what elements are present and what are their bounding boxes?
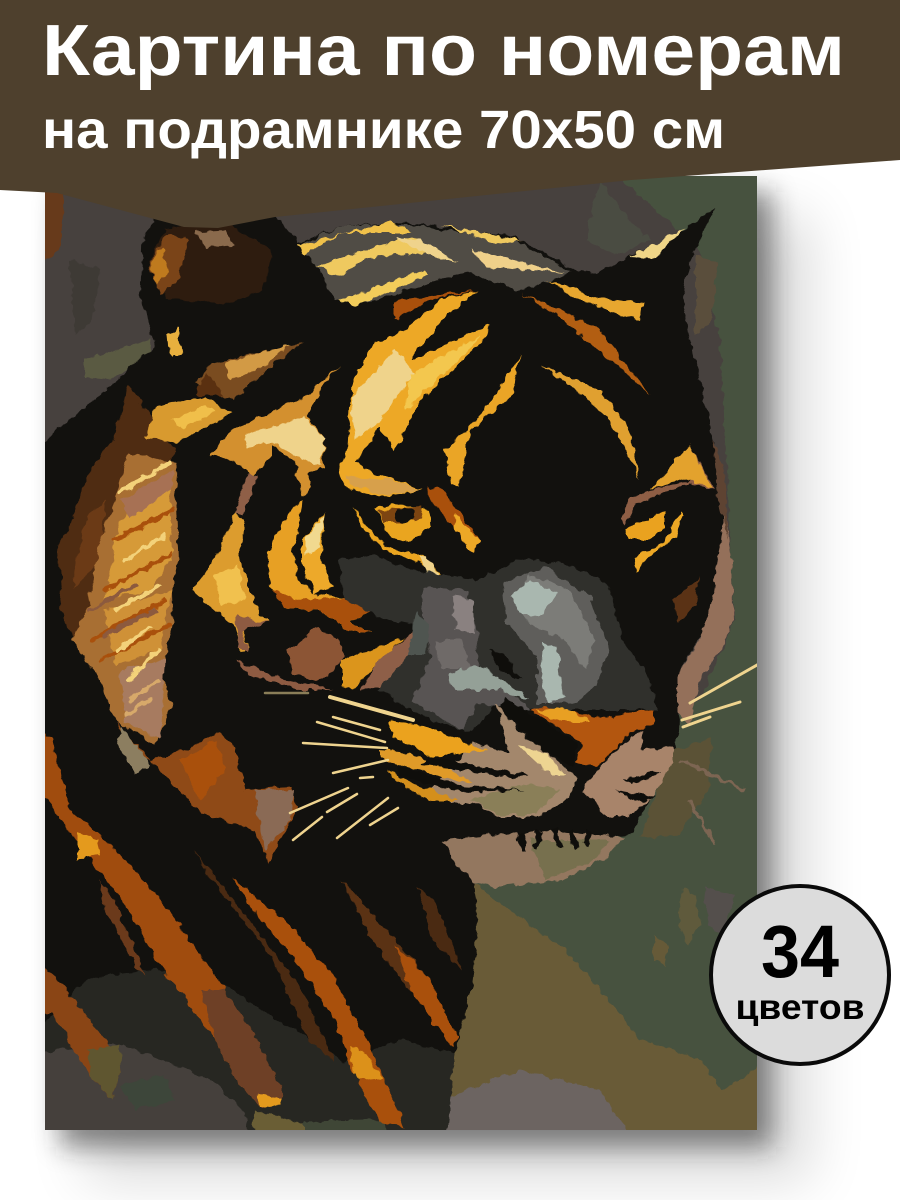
header banner	[0, 0, 900, 228]
mane brush strokes	[90, 462, 172, 715]
left cheek markings	[192, 365, 425, 690]
chest fur	[115, 720, 298, 863]
badge: 34 colours	[711, 886, 889, 1064]
body stripes	[30, 725, 462, 1127]
mane	[58, 343, 302, 745]
painted background	[30, 160, 770, 1150]
title: Картина по номерам	[42, 11, 845, 91]
right eye	[623, 510, 683, 573]
badge label: цветов	[736, 988, 864, 1027]
nose	[500, 697, 655, 767]
muzzle stripes and pads	[380, 703, 673, 817]
muzzle	[338, 555, 657, 733]
subtitle: на подрамнике 70х50 см	[42, 100, 725, 160]
badge number: 34	[761, 910, 839, 993]
whiskers	[265, 665, 757, 840]
forehead top	[298, 222, 683, 306]
left eye	[353, 487, 480, 587]
painting: tiger on canvas	[30, 160, 770, 1150]
dark lower-left fur	[45, 968, 455, 1130]
forehead markings	[338, 280, 715, 525]
ear left	[149, 222, 272, 355]
chin fur	[443, 830, 623, 887]
right face fur	[640, 255, 745, 845]
canvas shadow	[60, 192, 810, 1180]
tiger silhouette	[45, 208, 724, 1064]
